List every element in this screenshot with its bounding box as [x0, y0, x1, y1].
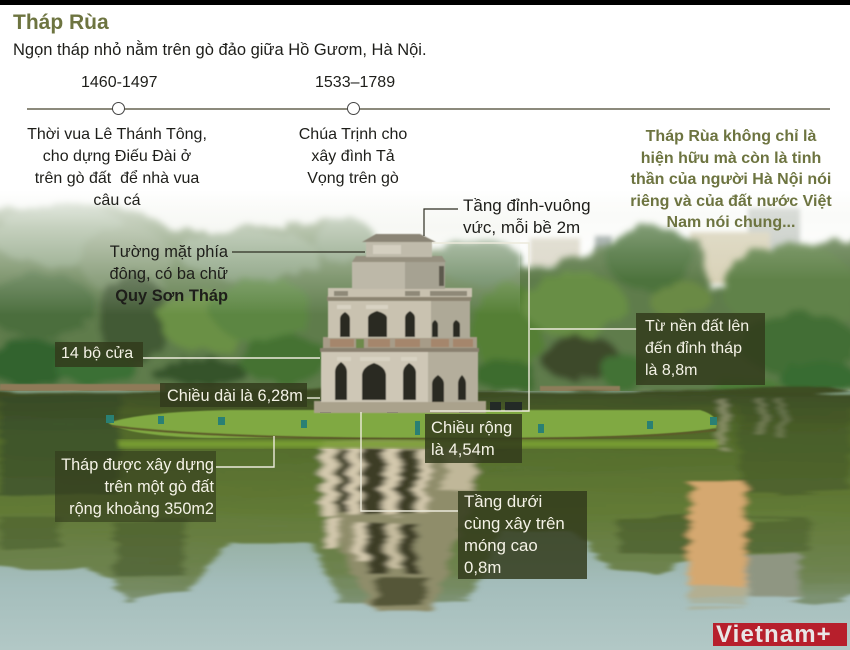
label: base floor: 0,8m	[464, 558, 501, 577]
label: base floor: cùng xây trên	[464, 514, 565, 533]
date 1460-1497: 1460-1497	[81, 74, 158, 91]
event text 1: câu cá	[93, 192, 141, 209]
event text 1: Thời vua Lê Thánh Tông,	[27, 126, 207, 143]
spotlights	[320, 400, 522, 413]
orange building reflection	[688, 482, 747, 600]
label: base floor: móng cao	[464, 536, 538, 555]
date 1533-1789: 1533–1789	[315, 74, 395, 91]
event text 1: trên gò đất để nhà vua	[35, 170, 199, 187]
quote: hiện hữu mà còn là tinh	[641, 150, 821, 166]
label: top floor: Tầng đỉnh-vuông	[463, 196, 591, 215]
marker 1460-1497	[112, 102, 125, 115]
label: top floor	[463, 196, 591, 237]
distant buildings	[530, 208, 800, 284]
water	[0, 391, 850, 650]
label: 14 doors: 14 bộ cửa	[61, 345, 133, 362]
marker 1533-1789	[347, 102, 360, 115]
label: height: là 8,8m	[645, 362, 697, 379]
label: mound: rộng khoảng 350m2	[69, 500, 214, 518]
label: length	[160, 383, 307, 407]
event text 2: Chúa Trịnh cho	[299, 126, 407, 143]
label: height: đến đỉnh tháp	[645, 340, 742, 357]
timeline axis	[27, 108, 830, 110]
island	[108, 410, 718, 448]
quote	[630, 128, 832, 231]
label: mound: Tháp được xây dựng	[61, 456, 214, 474]
subtitle: Ngọn tháp nhỏ nằm trên gò đảo giữa Hồ Gươm, Hà Nội.	[13, 41, 427, 59]
connector lines, light	[143, 243, 637, 511]
label: height: Từ nền đất lên	[645, 318, 749, 335]
quote: thần của người Hà Nội nói	[631, 171, 831, 188]
label: east wall: Tường mặt phía	[110, 243, 228, 261]
tower	[314, 234, 486, 413]
timeline	[27, 74, 830, 115]
top bar	[0, 0, 850, 5]
label: 14 doors	[55, 342, 143, 367]
label: width: Chiều rộng	[431, 418, 512, 437]
trees	[0, 203, 850, 398]
label: east wall: Quy Sơn Tháp	[115, 287, 228, 305]
fog	[0, 190, 520, 315]
label: base floor	[458, 491, 587, 579]
quote: Tháp Rùa không chỉ là	[646, 128, 816, 145]
event text 2: xây đình Tả	[311, 148, 395, 165]
label: east wall: đông, có ba chữ	[109, 265, 228, 283]
label: width	[425, 414, 522, 463]
label: top floor: vức, mỗi bề 2m	[463, 218, 580, 237]
label: length: Chiều dài là 6,28m	[167, 387, 303, 405]
event text 1: cho dựng Điếu Đài ở	[43, 148, 191, 165]
shore	[0, 384, 165, 391]
label: base floor: Tầng dưới	[464, 492, 542, 511]
quote: riêng và của đất nước Việt	[630, 192, 832, 210]
title: Tháp Rùa	[13, 11, 109, 34]
event text 2: Vọng trên gò	[307, 170, 399, 187]
label: east wall	[109, 243, 228, 305]
connector lines, dark	[232, 209, 458, 252]
label: width: là 4,54m	[431, 440, 495, 459]
tower reflection	[323, 442, 476, 612]
water reflections	[0, 391, 850, 612]
label: mound: trên một gò đất	[104, 478, 214, 496]
event text 1	[27, 126, 207, 209]
quote: Nam nói chung...	[667, 214, 795, 231]
label: height	[636, 313, 765, 385]
lamps	[106, 415, 717, 435]
event text 2	[299, 126, 407, 187]
label: mound	[55, 451, 216, 522]
